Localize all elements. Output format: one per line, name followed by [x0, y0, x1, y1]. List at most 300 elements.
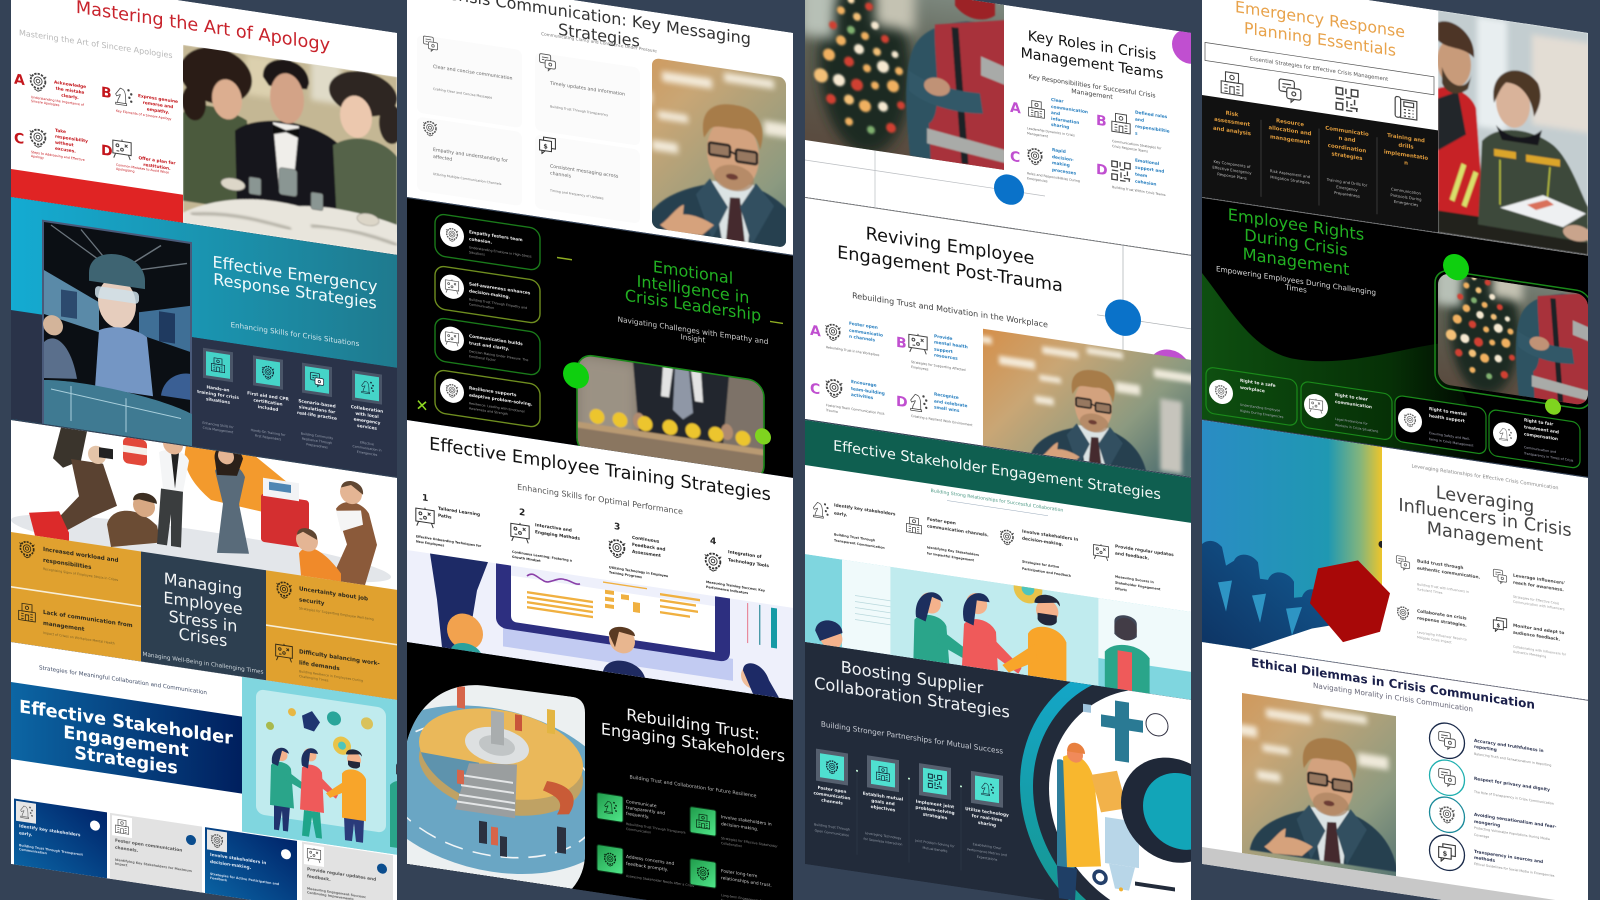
goal B: Employees [911, 365, 929, 372]
card: identify: early. [19, 830, 33, 838]
stress item: balance: life demands [299, 660, 340, 672]
title: Strategies [558, 20, 640, 51]
title: Management [1243, 244, 1349, 279]
title: Boosting Supplier [841, 657, 984, 698]
right card: mental health: being in Crisis Management [1429, 437, 1474, 448]
stress item: workload: Increased workload and [43, 547, 119, 564]
stress item: balance: Building Resilience in Employees During [299, 669, 363, 683]
item C: Take [55, 128, 66, 135]
feature: collaboration: Effective [360, 440, 374, 446]
principle: transparency: Ethical Guidelines for Social Media in Emergencies [1474, 862, 1555, 878]
step 3: 3 [614, 522, 620, 533]
photo: three people at a table [180, 40, 403, 256]
step 2: Continuous Learning: Fostering a [512, 550, 572, 563]
card: self-awareness: Building Trust Through Empathy and [469, 297, 527, 310]
feature: collaboration: Collaboration [351, 404, 383, 415]
column: risk assessment: and analysis [1213, 126, 1251, 137]
role B: Communications Strategies for [1112, 139, 1162, 151]
role A: Clear [1051, 97, 1064, 105]
card: empathy: Empathy fosters team [469, 229, 523, 243]
step 2: Interactive and [535, 522, 572, 534]
title: Effective Employee Training Strategies [429, 433, 771, 506]
goal A: n channels [849, 334, 876, 344]
strategy: mutual goals: for Seamless Interaction [864, 837, 902, 847]
feature: concerns [597, 844, 694, 888]
role D: support and [1135, 165, 1164, 175]
message card 1: Crafting Clear and Concise Messages [433, 87, 492, 100]
subtitle: Strategies for Meaningful Collaboration and Communication [39, 665, 207, 696]
role C: making [1052, 160, 1070, 169]
card: resilience: Awareness and Strength [469, 406, 508, 416]
item B: B [101, 85, 112, 102]
tactic: collaborate: Mitigate Crisis Impact [1417, 635, 1452, 645]
right card: fair treatment: compensation [1524, 431, 1558, 442]
strategy 4: and feedback. [1115, 551, 1150, 562]
photo: man with glasses [1104, 610, 1482, 900]
step 1: Paths [438, 513, 452, 521]
strategy 4: Efforts [1115, 587, 1127, 592]
photo: woman in helmet at control table [42, 220, 192, 446]
subtitle: Building Trust and Collaboration for Future Resilience [630, 774, 757, 799]
stress item: balance: Difficulty balancing work- [299, 649, 380, 667]
goal A: Foster open [849, 321, 878, 331]
goal C: C [810, 381, 820, 398]
strategy: technology: Expectations [977, 855, 998, 862]
item C: without [55, 140, 74, 148]
message card 4: Consistent messaging across [550, 163, 619, 180]
strategy: technology: Establishing Clear [973, 842, 1002, 851]
item B: Key Elements of a Sincere Apology [116, 109, 172, 121]
step 4: Integration of [728, 549, 762, 560]
step 3 [609, 521, 669, 583]
goal C: Encourage [851, 379, 877, 389]
boxed subtitle: Essential Strategies for Effective Crisis Management [1250, 56, 1388, 83]
tactic: monitor: Authentic Messaging [1513, 650, 1546, 659]
column: training: implementatio [1384, 149, 1428, 162]
role D [1096, 152, 1166, 197]
card: resilience: adaptive problem-solving. [469, 392, 533, 408]
item C: excuses. [55, 147, 76, 155]
strategy: open communication: Foster open [818, 785, 846, 795]
role B: Crisis Response Teams [1112, 144, 1148, 153]
step 4: 4 [710, 536, 716, 547]
message card 2: Timely updates and information [549, 80, 625, 98]
item B: Express genuine [138, 93, 178, 105]
feature: first aid: First Responders [255, 434, 281, 442]
strategy: joint problem solving: Mutual Benefits [923, 846, 948, 853]
panel: Emotional Intelligence in Crisis Leadership [407, 198, 793, 486]
right card: mental health: Right to mental [1429, 406, 1467, 418]
strategy: mutual goals: goals and [871, 798, 895, 807]
role A: A [1010, 100, 1021, 117]
strategy: open communication: Building Trust Through [814, 822, 850, 832]
strategy 2: Foster open [927, 516, 956, 527]
subtitle: Empowering Employees During Challenging [1216, 264, 1376, 297]
card: involve: Feedback [210, 876, 228, 883]
card: self-awareness: Self-awareness enhances [469, 281, 531, 297]
feature: communicate: Communicate [626, 799, 657, 809]
right card: fair treatment: Communication and [1524, 445, 1556, 454]
tactic: build trust: Turbulent Times [1416, 587, 1443, 595]
panel: Emergency Response Planning Essentials [1202, 0, 1592, 256]
card: involve: decision-making. [210, 859, 252, 871]
card: empathy: Situations [469, 250, 485, 257]
strategy 4 [1094, 540, 1174, 599]
strategy: mutual goals: Leveraging Technology [865, 831, 901, 840]
column: risk assessment [1212, 109, 1252, 182]
principle: sensationalism: Avoiding sensationalism and fear- [1474, 812, 1557, 830]
item C: responsibility [55, 134, 88, 145]
card: identify: Building Trust Through Transparent [19, 843, 83, 857]
item D: Apologizing [116, 167, 134, 174]
feature: concerns: feedback promptly. [626, 861, 668, 873]
right card: mental health [1395, 395, 1486, 455]
step 2 [511, 507, 580, 569]
feature: involve: Involve stakeholders in [721, 814, 772, 828]
column: resource allocation: Resource [1276, 118, 1304, 128]
goal D: D [896, 394, 908, 411]
dark planning band [1202, 95, 1438, 232]
card: updates: Measuring Engagement Success: [307, 886, 366, 899]
role C: Rapid [1052, 147, 1066, 155]
column: risk assessment: Effective Emergency [1212, 165, 1252, 176]
panel: Rebuilding Trust Engaging Stakeholders [362, 635, 793, 900]
goal C: team-building [851, 386, 885, 397]
step 3: Assessment [632, 549, 661, 559]
principle: transparency: methods [1474, 855, 1495, 864]
center panel with title [141, 552, 266, 680]
tactic: leverage reach [1493, 569, 1565, 611]
right card: clear communication: Workers in Crisis Situations [1335, 423, 1379, 433]
stress item: communication: Impact of Crises on Workplace Mental Health [43, 631, 115, 646]
role A: information [1051, 116, 1079, 126]
title: Employee Rights [1228, 205, 1364, 244]
right card: fair treatment: Right to fair [1524, 417, 1554, 428]
feature: scenario simulations: Preparedness [306, 442, 328, 450]
item B [102, 86, 178, 120]
feature: hands-on training: Hands-on [207, 384, 229, 394]
role B: Defined roles [1135, 110, 1168, 120]
strategy 3: Strategies for Active [1022, 560, 1060, 569]
column: communication: Preparedness [1334, 190, 1360, 199]
role A: sharing [1051, 122, 1069, 131]
title: Collaboration Strategies [814, 673, 1010, 722]
item A: Understanding the Importance of [31, 95, 85, 107]
item D: restitution. [143, 162, 171, 172]
subtitle: Navigating Challenges with Empathy and [618, 315, 768, 346]
feature: scenario simulations: Scenario-based [298, 398, 336, 410]
step 3: Feedback and [632, 542, 666, 553]
panel: Effective Stakeholder Engagement Strategies (blue) [11, 642, 418, 900]
photo: man with glasses [482, 0, 902, 325]
role D: team [1135, 172, 1148, 179]
illustration: stressed employees [11, 428, 391, 585]
orange panel left [11, 532, 141, 662]
header band with title: Effective Stakeholder Engagement Strategies [833, 438, 1161, 503]
role D: cohesion [1135, 179, 1156, 188]
goal C [810, 373, 885, 421]
role C: Emergencies [1027, 176, 1048, 183]
tactic: collaborate: Collaborate on crisis [1417, 608, 1467, 622]
item C: Steps to Addressing and Effective [31, 150, 85, 162]
principle: accuracy [1430, 721, 1551, 774]
card: updates [302, 842, 393, 900]
principle: sensationalism: Protecting Vulnerable Populations During Media [1474, 826, 1550, 841]
panel: Effective Emergency Response Strategies [11, 197, 397, 477]
goal C: Fostering Team Communication Post- [826, 403, 885, 416]
panel: Effective Stakeholder Engagement Strategies (green) [805, 420, 1191, 775]
message card 3: Empathy and understanding for [433, 147, 508, 164]
item B: empathy. [147, 106, 170, 116]
role C: C [1010, 149, 1020, 166]
feature: communicate [597, 792, 686, 840]
title: Influencers in Crisis [1398, 495, 1572, 541]
gradient panel with silhouettes [1202, 420, 1382, 669]
strategy 2: for Impactful Engagement [927, 551, 975, 562]
feature: hands-on training [197, 347, 239, 435]
message card 4 [535, 134, 640, 224]
feature: scenario simulations: simulations for [299, 404, 336, 416]
tactic: leverage reach: Strategies for Effective Crisis [1513, 595, 1560, 606]
column: communication: Communicatio [1325, 126, 1369, 138]
goal D: Creating a Resilient Work Environment [911, 414, 973, 427]
message card 3 [423, 120, 508, 185]
strategy: open communication: communication [814, 790, 850, 802]
principle: accuracy: Balancing Truth and Sensationalism in Reporting [1474, 752, 1551, 767]
feature: hands-on training: Enhancing Skills for [202, 421, 234, 429]
card: communication: Decision Making Under Pressure: The [469, 349, 528, 362]
feature: first aid: certification [253, 397, 283, 408]
boxed subtitle [1205, 42, 1434, 95]
column: resource allocation: management [1270, 134, 1310, 146]
illustration: team handshake [805, 485, 1191, 775]
strategy: technology: for real-time [972, 813, 1002, 824]
step 1: Tailored Learning [438, 506, 480, 518]
illustration: circular hub [362, 635, 622, 896]
role B [1096, 104, 1170, 157]
panel: Crisis Communication Key Messaging [407, 0, 793, 255]
principle: transparency: Transparency in sources and [1474, 849, 1543, 865]
stress item: balance: Challenging Times [299, 674, 329, 683]
feature: long-term: relationships and trust. [721, 875, 772, 889]
column: communication: strategies [1332, 151, 1362, 162]
feature: hands-on training: training for crisis [197, 389, 239, 401]
title: Response Strategies [213, 269, 377, 313]
column: communication [1325, 126, 1369, 200]
goal B [896, 328, 968, 377]
strategy 1: Transparent Communication [834, 538, 885, 550]
title: Key Roles in Crisis [1028, 28, 1156, 64]
role B: responsibilitie [1135, 124, 1170, 135]
photo: worker and Christmas tree [800, 0, 1010, 176]
right card: clear communication [1301, 381, 1392, 440]
right card: safe workplace: Understanding Employee [1240, 403, 1280, 413]
feature: involve: Strategies for Effective Stakeholder [721, 836, 778, 849]
step 4: Performance Indicators [706, 585, 748, 595]
strategy 1: early. [834, 510, 848, 518]
card: self-awareness [435, 265, 540, 324]
column: communication: Emergency [1336, 184, 1358, 192]
center panel with title: Managing Well-Being in Challenging Times [143, 652, 263, 676]
goal B: B [896, 335, 907, 352]
feature: first aid [247, 354, 289, 443]
tactic: leverage reach: Leverage influencers' [1513, 573, 1565, 586]
step 2: Growth Mindset [512, 555, 541, 563]
card: identify: Communication [19, 847, 48, 855]
strategy 4: Measuring Success in [1115, 575, 1154, 584]
column: risk assessment: Key Components of [1214, 159, 1251, 169]
title banner: Strategies [74, 743, 178, 779]
card: updates: Provide regular updates and [307, 866, 376, 883]
item A: Acknowledge [54, 79, 86, 90]
item D [102, 140, 176, 174]
title banner: Effective Stakeholder [19, 696, 233, 749]
role C: decision- [1052, 154, 1074, 163]
card: empathy: cohesion. [469, 236, 492, 246]
column: training: drills [1398, 142, 1414, 151]
decorative circles [1105, 297, 1192, 397]
goal A: A [810, 323, 821, 340]
principle: accuracy: reporting [1474, 744, 1497, 753]
column: communication: Training and Drills for [1326, 177, 1368, 188]
card: foster [110, 813, 202, 893]
message card 1: Clear and concise communication [433, 64, 513, 82]
role B: B [1096, 113, 1107, 130]
card: communication [435, 317, 540, 376]
feature: long-term: Foster long-term [721, 868, 757, 880]
panel: Ethical Dilemmas in Crisis Communication [1104, 610, 1588, 900]
goal D: small wins [934, 404, 960, 414]
role A: Management [1027, 131, 1049, 139]
tactic: leverage reach: Communication with Influencers [1513, 600, 1565, 611]
item C [14, 128, 88, 161]
center panel with title: Managing [164, 569, 242, 600]
right card: safe workplace: workplace [1240, 385, 1265, 394]
item A: the mistake [56, 86, 84, 96]
subtitle: Building Stronger Partnerships for Mutual Success [821, 719, 1003, 756]
photo: man with glasses [913, 268, 1215, 529]
circular illustration [1020, 639, 1310, 900]
message card 3: affected [433, 154, 452, 163]
item A: Sincere Apologies [31, 99, 60, 107]
feature: collaboration: Communication in [352, 444, 382, 453]
principle: accuracy: Accuracy and truthfulness in [1474, 738, 1544, 754]
panel: Employee Rights During Crisis Management [1202, 197, 1595, 478]
card: communication: trust and clarity. [469, 340, 510, 352]
card: foster: Foster open communication [115, 838, 182, 854]
right card: safe workplace [1206, 367, 1297, 426]
feature: involve: Collaboration [721, 841, 742, 848]
goal D [896, 386, 973, 427]
stress item: job security: Uncertainty about job [299, 586, 368, 603]
column: risk assessment: Response Plans [1217, 171, 1247, 181]
card: communication: Communication builds [469, 333, 523, 347]
strategy 1: Identify key stakeholders [834, 502, 896, 518]
title banner [11, 682, 242, 794]
strategy: mutual goals [863, 755, 904, 847]
strategy 2 [906, 513, 989, 565]
strategy: technology: Performance Metrics and [967, 847, 1007, 857]
strategy 1 [813, 499, 896, 552]
title: Emotional [653, 257, 733, 288]
stress item: workload [20, 541, 119, 582]
title: Crisis Leadership [625, 286, 761, 325]
feature: first aid: included [258, 404, 278, 413]
subtitle: Times [1284, 282, 1307, 295]
title: During Crisis [1244, 225, 1348, 260]
role C: processes [1052, 167, 1077, 177]
role C [1010, 141, 1080, 188]
feature: hands-on training: situations [206, 396, 230, 406]
column: training: Protocols During [1390, 192, 1422, 202]
goal D: and celebrate [934, 398, 967, 409]
card: resilience: Resilience: Leading with Emotional [469, 401, 525, 414]
stress item: workload: responsibilities [43, 558, 92, 571]
strategy 3 [1000, 525, 1078, 579]
strategy: joint problem solving: problem-solving [915, 805, 955, 816]
goal B: support [934, 346, 953, 355]
card: resilience [435, 369, 540, 428]
subtitle: Enhancing Skills for Optimal Performance [517, 483, 683, 516]
title banner: Engagement [63, 722, 189, 762]
strategy: technology [965, 770, 1009, 864]
tactic: build trust [1396, 555, 1481, 601]
step 3: Training Programs [609, 570, 642, 579]
strategy 4: Stakeholder Engagement [1115, 581, 1161, 591]
principle: transparency [1430, 833, 1555, 886]
card: foster: Identifying Key Stakeholders for Maximum [115, 858, 192, 873]
card: identify [14, 798, 107, 878]
tactic: monitor [1493, 617, 1567, 662]
subtitle: Enhancing Skills for Crisis Situations [231, 320, 360, 348]
principle: privacy [1430, 758, 1554, 811]
role A: and [1051, 110, 1060, 117]
photo: responders reviewing a tablet [1437, 10, 1592, 256]
right card: clear communication: Right to clear [1335, 392, 1369, 403]
step 1: New Employees [416, 539, 444, 548]
card: self-awareness: decision-making. [469, 288, 511, 301]
goal D: Recognize [934, 391, 959, 401]
subtitle: Leveraging Relationships for Effective Crisis Communication [1411, 463, 1559, 491]
photo: emoji balls on a shelf [577, 354, 764, 482]
strategy 3: Involve stakeholders in [1022, 529, 1078, 543]
right card: safe workplace: Rights During Emergencies [1240, 409, 1284, 419]
strategy: technology: sharing [978, 820, 996, 829]
role A: Leadership Dynamics in Crisis [1027, 126, 1075, 138]
panel: Reviving Employee Engagement Post-Trauma [805, 197, 1215, 529]
title: Rebuilding Trust: [626, 705, 760, 744]
message card 4: Timing and Frequency of Updates [549, 188, 604, 201]
decorative circles [994, 0, 1206, 234]
feature: involve [690, 806, 778, 854]
stress item: job security [276, 581, 374, 621]
subtitle: Rebuilding Trust and Motivation in the Workplace [852, 291, 1048, 329]
subtitle: Navigating Morality in Crisis Communication [1313, 681, 1473, 714]
column: training [1384, 132, 1428, 209]
feature: communicate: Rebuilding Trust Through Transparent [626, 822, 686, 835]
item A: clearly. [61, 93, 79, 101]
panel: Boosting Supplier Collaboration Strategies [805, 607, 1310, 900]
column: training: n [1404, 160, 1408, 167]
stress item: communication: management [43, 621, 85, 633]
step 1: Effective Onboarding Techniques for [416, 534, 482, 548]
column: resource allocation [1268, 117, 1312, 185]
step 2: Engaging Methods [535, 529, 580, 542]
right card: clear communication: Legal Protections for [1335, 417, 1368, 426]
step 4: Technology Tools [728, 557, 769, 569]
center panel with title: Stress in [169, 607, 237, 636]
tactic: monitor: audience feedback. [1513, 630, 1560, 643]
